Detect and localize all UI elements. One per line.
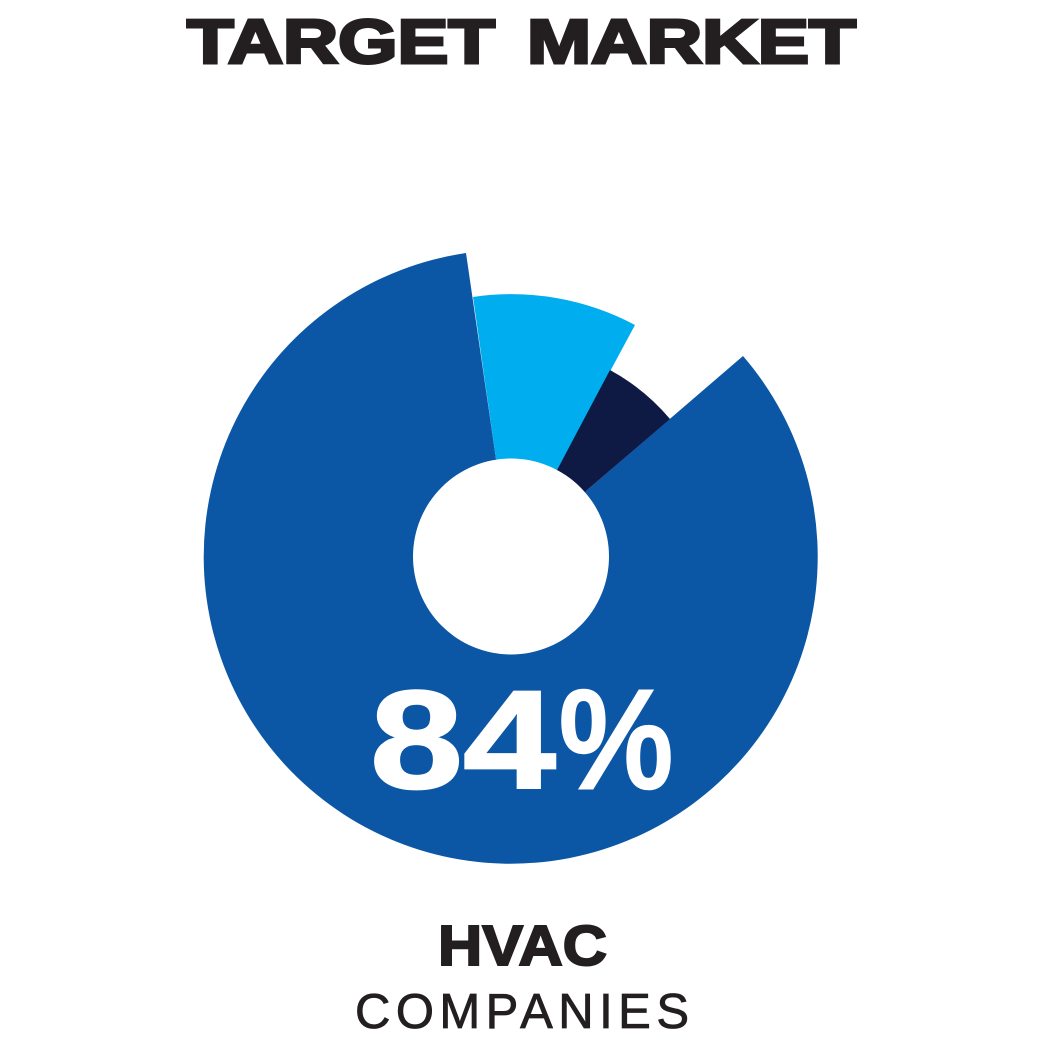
percentage label: 84 <box>370 661 556 818</box>
label: HVAC: HVAC <box>438 914 607 978</box>
donut chart <box>204 253 818 864</box>
segment: HVAC companies 84% <box>204 253 818 864</box>
title <box>187 8 856 77</box>
title: MARKET <box>527 8 856 77</box>
title: TARGET <box>187 8 495 77</box>
percentage label <box>370 661 673 818</box>
donut hole <box>413 458 609 654</box>
percentage label: % <box>559 663 673 817</box>
segment: light blue <box>473 294 635 557</box>
label: COMPANIES: COMPANIES <box>355 985 689 1039</box>
segment: navy <box>511 370 670 557</box>
